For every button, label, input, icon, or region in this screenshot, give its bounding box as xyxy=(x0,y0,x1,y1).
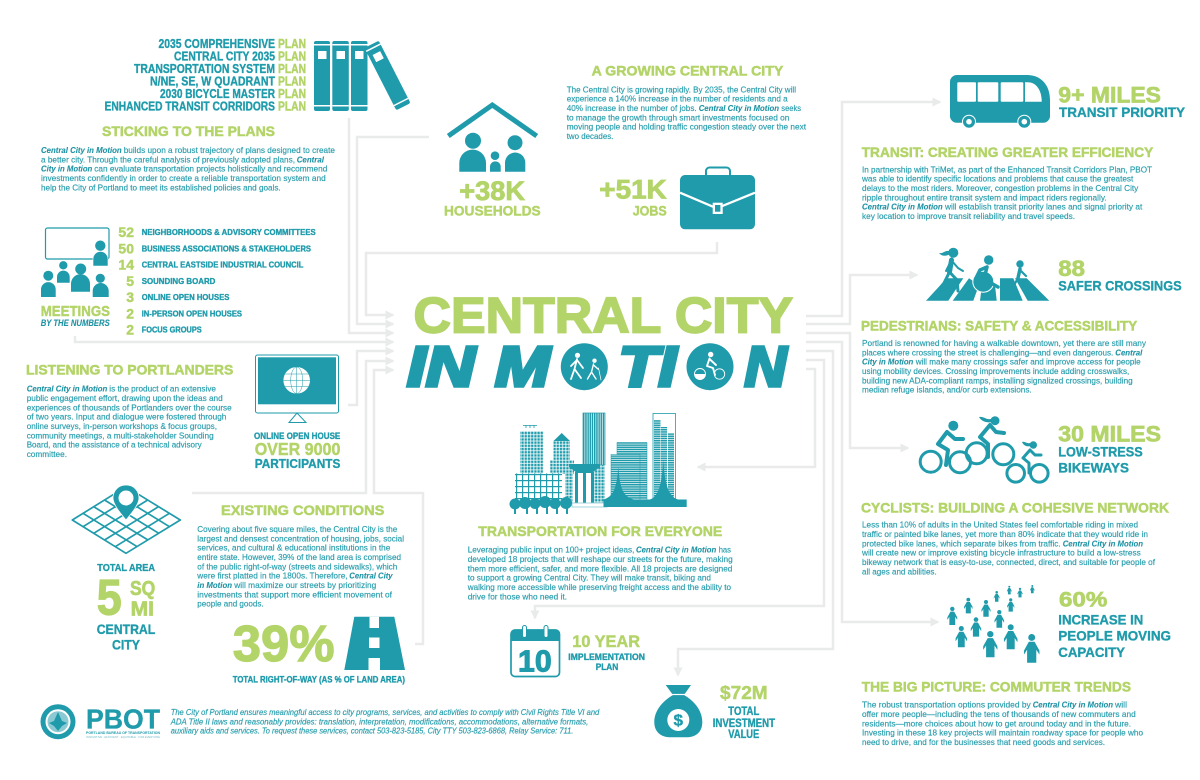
text block: sticking to the plans: a better city. Through the careful analysis of previously adopted plans, xyxy=(41,154,295,164)
logo: PBOT wordmark: PORTLAND BUREAU OF TRANSPORTATION xyxy=(86,731,160,735)
text block: cyclists: protected bike lanes, which separate bikes from traffic. xyxy=(862,538,1061,548)
text block: existing conditions: Covering about five square miles, the Central City is the xyxy=(197,524,398,534)
panel: plans list: PLAN xyxy=(278,62,306,76)
logo: PBOT seal xyxy=(40,704,76,739)
heading: transit: TRANSIT: CREATING GREATER EFFICIENCY xyxy=(862,144,1154,160)
list: meeting counts: SOUNDING BOARD xyxy=(142,276,215,286)
text block: sticking to the plans: can evaluate transportation projects holistically and recommend xyxy=(94,164,328,174)
stat: households xyxy=(444,176,541,218)
stat: total area: MI xyxy=(131,599,154,621)
stat: 10 year plan: IMPLEMENTATION xyxy=(568,652,645,663)
text block: cyclists: Less than 10% of adults in the United States feel comfortable riding in mixed xyxy=(862,520,1138,530)
text block: listening to portlanders: public engagement effort, drawing upon the ideas and xyxy=(27,393,223,403)
text block: listening to portlanders: is the product of an extensive xyxy=(109,384,216,394)
text block: a growing central city: to manage the growth through smart investments focused on xyxy=(567,112,790,122)
list: meeting counts: 2 xyxy=(126,305,134,321)
stat: jobs: +51K xyxy=(599,174,667,204)
panel: plans list: N/NE, SE, W QUADRANT xyxy=(150,74,275,88)
icon: money bag xyxy=(654,685,702,737)
icon: calendar: 10 xyxy=(518,644,552,679)
list: meeting counts: 5 xyxy=(126,273,134,289)
text block: the big picture: will xyxy=(1114,700,1127,710)
stat: 39% right-of-way: TOTAL RIGHT-OF-WAY (AS % OF LAND AREA) xyxy=(233,674,405,684)
title: in motion: IN xyxy=(407,335,477,399)
connector lines and arrows xyxy=(75,102,940,675)
icon: monitor with globe xyxy=(256,355,338,422)
list: meeting counts: 2 xyxy=(126,322,134,338)
heading: meetings by the numbers xyxy=(41,304,110,328)
stat: people moving capacity: CAPACITY xyxy=(1058,644,1126,660)
stat: people moving capacity: 60% xyxy=(1059,589,1108,612)
list: meeting counts: 3 xyxy=(126,289,134,305)
list: meeting counts: ONLINE OPEN HOUSES xyxy=(142,292,230,302)
stat: transit priority: 9+ MILES xyxy=(1058,82,1161,108)
icon: map grid with pin xyxy=(72,485,180,553)
icon: calendar xyxy=(511,626,560,679)
text block: existing conditions: of the public right-of-way (streets and sidewalks), which xyxy=(197,561,398,571)
text block: transit: In partnership with TriMet, as part of the Enhanced Transit Corridors Plan, PBOT xyxy=(862,164,1152,174)
stat: total area: CENTRAL xyxy=(97,621,156,637)
text block: pedestrians: will make many crossings safer and improve access for people xyxy=(915,357,1141,367)
text block: transit: was able to identify specific locations and problems that cause the greatest xyxy=(861,174,1134,184)
text block: transportation for everyone: walking more accessible while preserving freight access and the ability to xyxy=(467,582,731,592)
stat: 10 year plan: PLAN xyxy=(596,662,618,673)
text block: accessibility notice: ADA Title II laws and reasonably provides: translation, interpretation, modifications, accommodations, alternative formats, xyxy=(170,716,588,726)
text block: pedestrians: using mobility devices. Crossing improvements include adding crosswalks, xyxy=(862,366,1129,376)
icon: crowd of people xyxy=(947,585,1039,663)
heading: existing conditions: EXISTING CONDITIONS xyxy=(221,502,384,518)
list: meeting counts: 50 xyxy=(118,240,134,256)
list: meeting counts: 52 xyxy=(118,224,134,240)
text block: transportation for everyone: developed 18 projects that will reshape our streets for the future, making xyxy=(468,554,733,564)
text block: transit: ripple throughout entire transit system and impact riders regionally. xyxy=(862,192,1107,202)
stat: online open house participants: OVER 9000 xyxy=(255,439,341,459)
text block: sticking to the plans: Central xyxy=(297,154,325,164)
icon: house with family xyxy=(448,105,537,172)
text block: a growing central city: experience a 140% increase in the number of residents and a xyxy=(567,94,788,104)
text block: the big picture: The robust transportation options provided by xyxy=(862,700,1032,710)
text block: accessibility notice xyxy=(170,707,600,736)
text block: existing conditions: in Motion xyxy=(197,580,232,590)
stat: online open house participants xyxy=(254,431,341,471)
text block: pedestrians xyxy=(862,338,1147,395)
text block: existing conditions: investments that support more efficient movement of xyxy=(197,589,393,599)
text block: transportation for everyone: Leveraging public input on 100+ project ideas, xyxy=(468,545,634,555)
stat: total investment: VALUE xyxy=(728,729,760,741)
icon: binders xyxy=(314,41,411,111)
panel: plans list: 2035 COMPREHENSIVE xyxy=(158,37,275,51)
list: meeting counts xyxy=(118,224,316,338)
text block: transportation for everyone: them more efficient, safer, and more flexible. All 18 projects are designed xyxy=(468,563,733,573)
text block: cyclists: traffic or painted bike lanes, yet more than 80% indicate that they would ride in xyxy=(862,529,1148,539)
text block: sticking to the plans xyxy=(41,145,335,192)
text block: existing conditions: were first platted in the 1800s. Therefore, xyxy=(196,571,348,581)
logo: PBOT wordmark: INNOVATIVE · EFFICIENT · EQUITABLE · FOR EVERYONE xyxy=(86,735,160,739)
text block: existing conditions: services, and cultural & educational institutions in the xyxy=(197,543,391,553)
text block: the big picture: Investing in these 18 key projects will maintain roadway space for people who xyxy=(862,728,1143,738)
text block: listening to portlanders: community meetings, a multi-stakeholder Sounding xyxy=(27,430,214,440)
heading: a growing central city: A GROWING CENTRAL CITY xyxy=(592,62,784,78)
stat: 39% right-of-way: 39% xyxy=(233,615,334,672)
stat: total investment xyxy=(713,683,775,741)
text block: a growing central city: Central City in Motion xyxy=(699,103,779,113)
text block: transit: Central City in Motion xyxy=(862,202,943,212)
list: meeting counts: 14 xyxy=(118,257,134,273)
text block: listening to portlanders: Board, and the assistance of a technical advisory xyxy=(27,440,203,450)
icon: money bag: $ xyxy=(674,712,683,730)
text block: existing conditions: largest and densest concentration of housing, jobs, social xyxy=(197,533,404,543)
heading: the big picture: THE BIG PICTURE: COMMUTER TRENDS xyxy=(862,679,1131,695)
icon: cyclist in circle xyxy=(686,343,734,390)
text block: a growing central city: The Central City is growing rapidly. By 2035, the Central City will xyxy=(567,84,796,94)
icon: crosswalk pedestrians xyxy=(926,248,1049,301)
text block: listening to portlanders xyxy=(27,384,232,459)
panel: plans list: TRANSPORTATION SYSTEM xyxy=(134,62,275,76)
text block: the big picture: offer more people—including the tens of thousands of new commuters and xyxy=(862,709,1136,719)
text block: transportation for everyone: has xyxy=(719,545,731,555)
text block: listening to portlanders: of two years. Input and dialogue were fostered through xyxy=(27,412,227,422)
text block: cyclists: bikeway network that is easy-to-use, connected, direct, and suitable for people of xyxy=(862,557,1156,567)
stat: 10 year plan: 10 YEAR xyxy=(572,633,640,651)
text block: pedestrians: Central xyxy=(1115,347,1143,357)
stat: low-stress bikeways xyxy=(1058,422,1161,476)
list: meeting counts: IN-PERSON OPEN HOUSES xyxy=(142,308,242,318)
panel: plans list: PLAN xyxy=(278,74,306,88)
stat: transit priority: TRANSIT PRIORITY xyxy=(1059,104,1186,120)
stat: total investment: INVESTMENT xyxy=(713,718,775,730)
panel: plans list xyxy=(104,37,306,113)
text block: listening to portlanders: experiences of thousands of Portlanders over the course xyxy=(27,402,232,412)
list: meeting counts: FOCUS GROUPS xyxy=(142,325,202,335)
heading: transportation for everyone: TRANSPORTATION FOR EVERYONE xyxy=(478,523,722,539)
text block: a growing central city xyxy=(567,84,807,141)
text block: listening to portlanders: committee. xyxy=(27,449,67,459)
stat: total area xyxy=(97,562,156,652)
stat: safer crossings xyxy=(1058,256,1182,294)
panel: plans list: PLAN xyxy=(278,87,306,101)
text block: existing conditions: people and goods. xyxy=(197,599,264,609)
icon: bus xyxy=(950,75,1050,128)
stat: total area: 5 xyxy=(97,570,122,626)
text block: cyclists: will create new or improve existing bicycle infrastructure to build a low-stress xyxy=(861,548,1141,558)
text block: transportation for everyone: drive for those who need it. xyxy=(468,591,567,601)
logo: PBOT wordmark: PBOT xyxy=(86,703,160,734)
stat: online open house participants: ONLINE OPEN HOUSE xyxy=(254,431,340,442)
stat: total area: CITY xyxy=(112,636,141,652)
title: in motion: M xyxy=(495,335,552,399)
text block: pedestrians: City in Motion xyxy=(862,357,913,367)
stat: 39% right-of-way xyxy=(233,615,405,684)
text block: cyclists: all ages and abilities. xyxy=(862,566,937,576)
stat: online open house participants: PARTICIPANTS xyxy=(255,456,341,471)
text block: transportation for everyone: to support a growing Central City. They will make transit, biking and xyxy=(468,573,711,583)
panel: plans list: PLAN xyxy=(278,37,306,51)
icon: meeting audience xyxy=(41,228,109,297)
panel: plans list: ENHANCED TRANSIT CORRIDORS xyxy=(104,99,275,113)
stat: households: HOUSEHOLDS xyxy=(444,204,541,218)
text block: existing conditions: Central City xyxy=(349,571,393,581)
text block: sticking to the plans: help the City of Portland to meet its established policies and goals. xyxy=(41,182,281,192)
stat: total investment: TOTAL xyxy=(728,706,759,718)
heading: cyclists: CYCLISTS: BUILDING A COHESIVE NETWORK xyxy=(861,500,1169,516)
text block: cyclists xyxy=(861,520,1156,576)
text block: the big picture xyxy=(862,700,1143,747)
stat: people moving capacity: PEOPLE MOVING xyxy=(1058,628,1171,644)
icon: pedestrians in circle xyxy=(561,343,608,390)
text block: sticking to the plans: investments confidently in order to create a reliable transportation system and xyxy=(41,173,326,183)
text block: listening to portlanders: online surveys, in-person workshops & focus groups, xyxy=(27,421,217,431)
text block: sticking to the plans: City in Motion xyxy=(41,164,92,174)
text block: accessibility notice: The City of Portland ensures meaningful access to city programs, services, and activities to comply with Civil Rights Title VI and xyxy=(171,707,600,717)
text block: existing conditions: will maximize our streets by prioritizing xyxy=(233,580,377,590)
text block: sticking to the plans: Central City in Motion xyxy=(41,145,122,155)
stat: low-stress bikeways: BIKEWAYS xyxy=(1058,460,1129,476)
text block: transit: key location to improve transit reliability and travel speeds. xyxy=(862,211,1075,221)
panel: plans list: 2030 BICYCLE MASTER xyxy=(160,87,275,101)
stat: people moving capacity xyxy=(1058,589,1171,660)
text block: a growing central city: two decades. xyxy=(567,131,613,141)
stat: total investment: $72M xyxy=(720,683,768,703)
stat: jobs: JOBS xyxy=(633,204,667,218)
text block: a growing central city: seeks xyxy=(781,103,801,113)
list: meeting counts: CENTRAL EASTSIDE INDUSTRIAL COUNCIL xyxy=(142,260,303,270)
stat: safer crossings: 88 xyxy=(1058,256,1085,281)
heading: sticking to the plans: STICKING TO THE PLANS xyxy=(102,123,275,139)
text block: pedestrians: places where crossing the street is challenging—and even dangerous. xyxy=(862,347,1113,357)
text block: transportation for everyone: Central City in Motion xyxy=(636,545,716,555)
text block: pedestrians: building new ADA-compliant ramps, installing signalized crossings, building xyxy=(862,375,1133,385)
title: in motion: O xyxy=(692,335,724,399)
heading: meetings by the numbers: BY THE NUMBERS xyxy=(41,318,110,328)
text block: pedestrians: Portland is renowned for having a walkable downtown, yet there are still many xyxy=(862,338,1147,348)
stat: households: +38K xyxy=(459,176,525,206)
text block: pedestrians: median refuge islands, and/or curb extensions. xyxy=(862,385,1032,395)
text block: sticking to the plans: builds upon a robust trajectory of plans designed to create xyxy=(124,145,335,155)
text block: transit: delays to the most riders. Moreover, congestion problems in the Central City xyxy=(862,183,1139,193)
text block: accessibility notice: auxiliary aids and services. To request these services, contact 503-823-5185, City TTY 503-823-6868, Relay Service: 711. xyxy=(171,726,573,736)
list: meeting counts: BUSINESS ASSOCIATIONS & STAKEHOLDERS xyxy=(142,243,311,253)
text block: transportation for everyone xyxy=(467,545,733,601)
text block: existing conditions xyxy=(196,524,404,609)
icon: city skyline xyxy=(510,413,687,514)
heading: meetings by the numbers: MEETINGS xyxy=(41,304,110,320)
title: in motion: O xyxy=(566,335,598,399)
title: central city: CENTRAL CITY xyxy=(414,288,793,344)
title: in motion: N xyxy=(744,335,788,399)
text block: the big picture: Central City in Motion xyxy=(1033,700,1113,710)
heading: listening to portlanders: LISTENING TO PORTLANDERS xyxy=(26,362,233,378)
stat: transit priority xyxy=(1058,82,1186,120)
text block: existing conditions: entire state. However, 39% of the land area is comprised xyxy=(197,552,401,562)
panel: plans list: CENTRAL CITY 2035 xyxy=(174,50,275,64)
stat: safer crossings: SAFER CROSSINGS xyxy=(1058,278,1182,294)
text block: a growing central city: moving people and holding traffic congestion steady over the next xyxy=(567,122,807,132)
text block: a growing central city: 40% increase in the number of jobs. xyxy=(567,103,697,113)
icon: cyclists xyxy=(920,416,1048,482)
stat: total area: TOTAL AREA xyxy=(97,562,155,574)
panel: plans list: PLAN xyxy=(278,50,306,64)
text block: transit xyxy=(861,164,1152,221)
stat: jobs xyxy=(599,174,667,218)
text block: transit: will establish transit priority lanes and signal priority at xyxy=(944,202,1143,212)
text block: cyclists: Central City in Motion xyxy=(1063,538,1143,548)
panel: plans list: PLAN xyxy=(278,99,306,113)
heading: pedestrians: PEDESTRIANS: SAFETY & ACCESSIBILITY xyxy=(861,318,1138,334)
icon: road xyxy=(344,617,405,670)
list: meeting counts: NEIGHBORHOODS & ADVISORY COMMITTEES xyxy=(142,227,316,237)
text block: the big picture: residents—more choices about how to get around today and in the future. xyxy=(862,718,1131,728)
stat: low-stress bikeways: LOW-STRESS xyxy=(1058,444,1143,460)
stat: low-stress bikeways: 30 MILES xyxy=(1058,422,1161,447)
stat: 10 year plan xyxy=(568,633,645,673)
stat: people moving capacity: INCREASE IN xyxy=(1058,612,1143,628)
title: in motion xyxy=(407,335,788,399)
title: in motion: TI xyxy=(618,335,678,399)
stat: total area: SQ xyxy=(130,578,155,600)
text block: the big picture: need to drive, and for the businesses that need goods and services. xyxy=(862,737,1105,747)
text block: listening to portlanders: Central City in Motion xyxy=(27,384,107,394)
icon: briefcase xyxy=(680,168,755,229)
